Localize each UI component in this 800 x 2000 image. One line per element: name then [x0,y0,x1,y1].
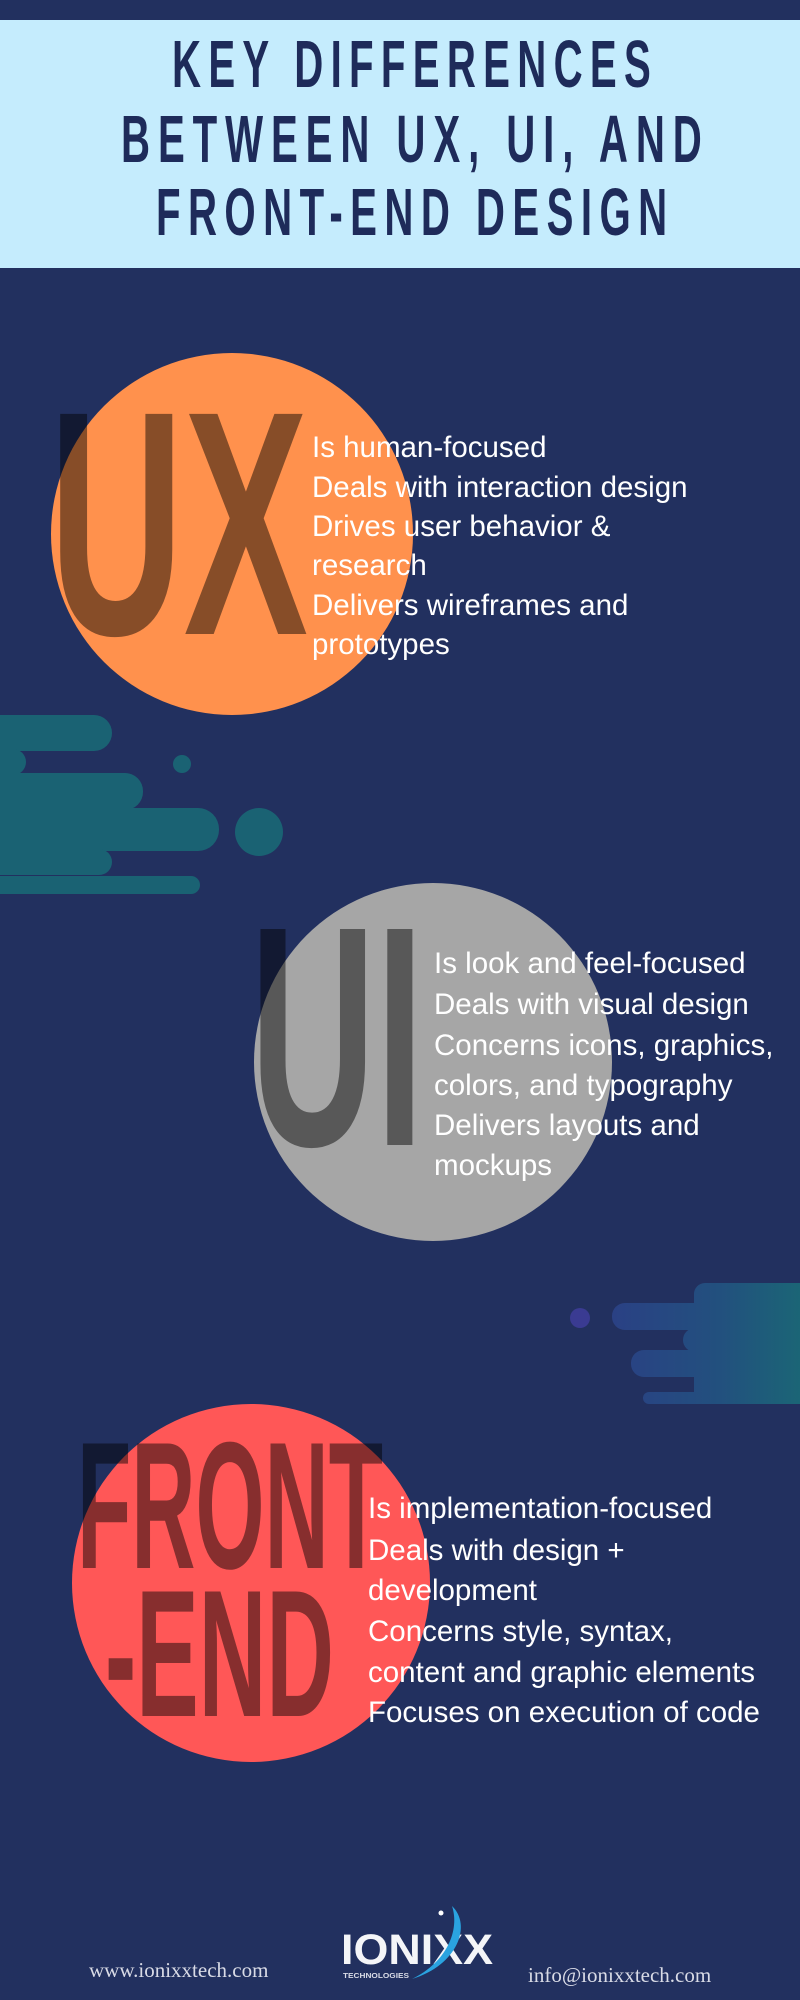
text block: Front-end points: content and graphic elements [368,1656,755,1689]
text block: UI points [434,947,773,1182]
text block: Front-end points [368,1492,760,1729]
text block: Front-end points: Is implementation-focused [368,1492,712,1525]
text block: UX points: prototypes [312,628,450,661]
footer: logo: IONIXX [341,1926,493,1974]
header banner [0,20,800,268]
text block: UI points: Is look and feel-focused [434,947,746,980]
decoration: gradient speed lines right [570,1283,800,1404]
panel: UI [250,861,773,1241]
footer: logo [341,1906,493,1980]
text block: UX points [312,431,688,661]
heading: UX letters: UX [49,344,309,702]
decoration: teal speed lines left [0,715,283,894]
text block: UX points: Delivers wireframes and [312,589,628,622]
text block: UI points: Delivers layouts and [434,1109,700,1142]
circle: UX orange [51,353,413,715]
title: FRONT-END DESIGN [156,174,667,250]
heading: FRONT-END letters: -END [105,1553,334,1755]
text block: UI points: mockups [434,1149,552,1182]
text block: UI points: Concerns icons, graphics, [434,1029,773,1062]
text block: UX points: Is human-focused [312,431,546,464]
panel: Front-end [72,1404,760,1762]
text block: UI points: Deals with visual design [434,988,749,1021]
text block: UX points: research [312,549,427,582]
panel: Front-end: FRONT [77,1405,383,1607]
circle: UI grey [254,883,612,1241]
panel: UX [49,344,688,715]
text block: Front-end points: Concerns style, syntax, [368,1615,673,1648]
title: KEY DIFFERENCES [172,26,651,102]
heading: FRONT-END letters [77,1405,383,1755]
footer: website: www.ionixxtech.com [89,1958,268,1982]
title: BETWEEN UX, UI, AND [121,101,702,177]
circle: Front-end red [72,1404,430,1762]
heading: UI letters: UI [250,861,424,1212]
text block: Front-end points: development [368,1574,537,1607]
text block: UX points: Deals with interaction design [312,471,688,504]
text block: UX points: Drives user behavior & [312,510,611,543]
text block: Front-end points: Deals with design + [368,1534,625,1567]
footer: email: info@ionixxtech.com [528,1963,711,1987]
footer: logo: TECHNOLOGIES [343,1973,409,1980]
text block: UI points: colors, and typography [434,1069,733,1102]
text block: Front-end points: Focuses on execution of code [368,1696,760,1729]
title [121,26,702,250]
